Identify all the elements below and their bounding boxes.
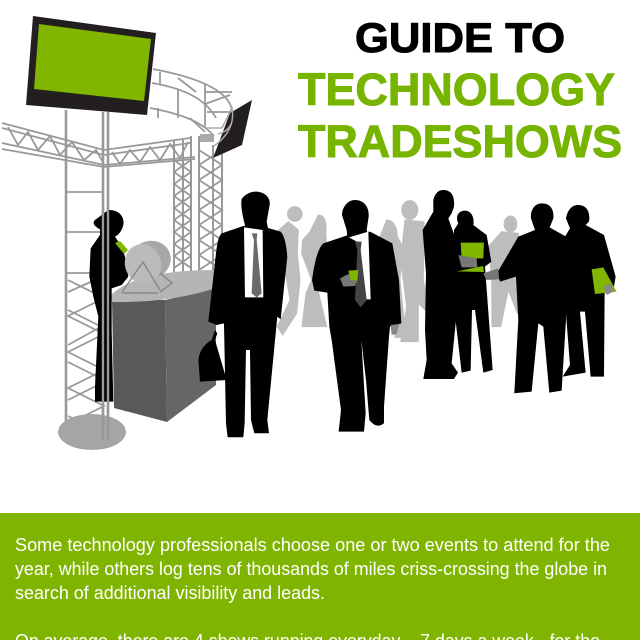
intro text block — [15, 535, 610, 640]
raffle drum on counter — [119, 235, 176, 293]
title — [298, 14, 622, 167]
booth base — [58, 414, 126, 450]
title: GUIDE TO — [355, 14, 565, 61]
intro text block: search of additional visibility and leads. — [15, 583, 325, 603]
booth counter — [110, 270, 216, 422]
man seen from behind — [483, 203, 566, 393]
title: TECHNOLOGY — [298, 64, 615, 115]
businessman with briefcase — [198, 192, 287, 437]
woman with green folder — [454, 211, 493, 373]
icon: main monitor — [26, 16, 156, 115]
intro text block: Some technology professionals choose one or two events to attend for the — [15, 535, 610, 555]
businessman with phone — [312, 200, 401, 432]
foreground business people group — [312, 190, 617, 432]
panel: intro green band — [0, 513, 640, 640]
title: TRADESHOWS — [298, 116, 622, 167]
man in profile — [423, 190, 458, 379]
icon: side monitor — [200, 100, 252, 158]
man with green folder — [563, 205, 617, 377]
background crowd silhouettes — [277, 201, 520, 342]
booth truss structure — [2, 69, 232, 440]
woman staff silhouette — [89, 210, 128, 402]
intro text block: year, while others log tens of thousands of miles criss-crossing the globe in — [15, 559, 607, 579]
green lanyard — [115, 241, 128, 254]
truss front of woman — [103, 210, 108, 440]
